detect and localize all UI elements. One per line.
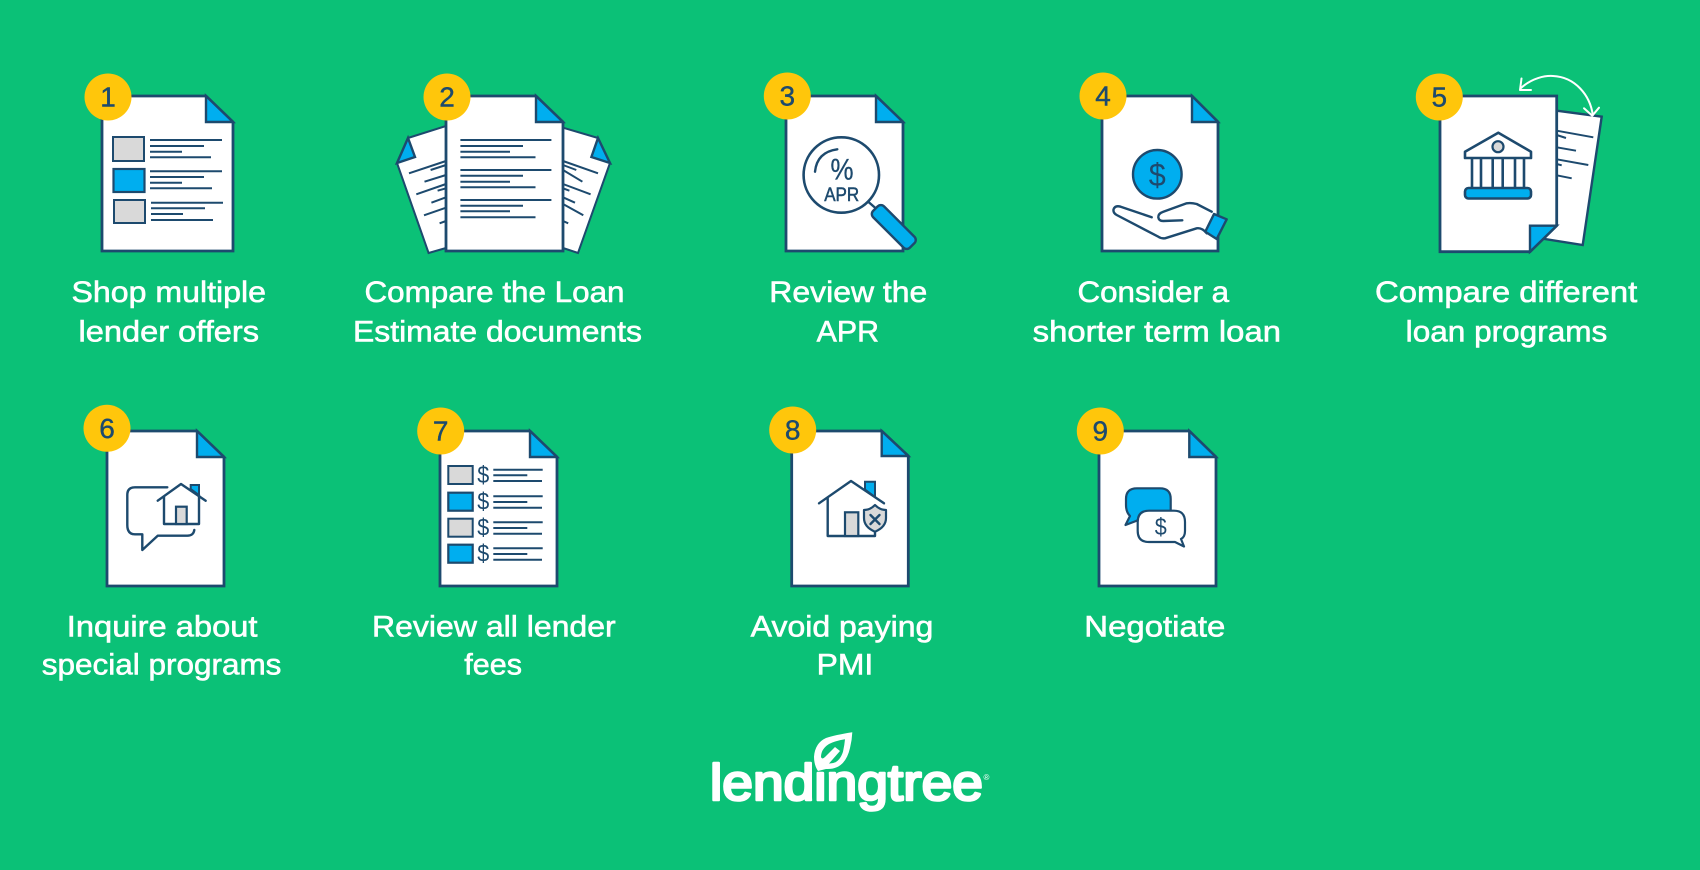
icon: document with hand and coin xyxy=(1102,96,1227,251)
icon: document with house and shield xyxy=(792,431,908,586)
label: step 4: shorter term loan xyxy=(1033,316,1281,348)
icon: document with fee list xyxy=(440,431,557,586)
icon: document with fee list: $ xyxy=(477,514,489,542)
badge: number 5: 5 xyxy=(1432,82,1447,112)
label: step 6 xyxy=(42,610,281,682)
panel: step 6 inquire about special programs xyxy=(42,405,281,682)
icon: document with magnifier: APR xyxy=(824,185,859,206)
icon: document with speech bubbles xyxy=(1099,431,1216,586)
panel: step 5 compare different loan programs xyxy=(1375,74,1638,348)
panel: step 7 review all lender fees xyxy=(372,408,616,682)
label: step 6: special programs xyxy=(42,648,281,682)
label: step 3: APR xyxy=(817,316,879,348)
label: step 1 xyxy=(72,276,266,348)
label: step 1: lender offers xyxy=(78,316,259,348)
label: step 2: Estimate documents xyxy=(353,316,642,348)
badge: number 3 xyxy=(764,72,811,120)
badge: number 6 xyxy=(84,405,130,452)
label: step 6: Inquire about xyxy=(67,610,258,644)
label: step 1: Shop multiple xyxy=(72,276,266,309)
label: step 3: Review the xyxy=(769,276,927,309)
panel: step 8 avoid paying PMI xyxy=(751,406,933,682)
icon: document with bank xyxy=(1440,96,1557,252)
badge: number 1 xyxy=(84,74,132,120)
badge: number 2 xyxy=(424,74,470,120)
icon: leaf xyxy=(814,732,852,771)
badge: number 1: 1 xyxy=(100,82,116,112)
icon: three fanned documents xyxy=(397,96,610,253)
badge: number 6: 6 xyxy=(99,413,115,444)
icon: back page xyxy=(1545,111,1602,245)
icon: document with fee list: $ xyxy=(477,540,489,568)
icon: document with speech bubbles: $ xyxy=(1155,514,1167,541)
badge: number 5 xyxy=(1416,74,1463,120)
panel: step 2 compare the loan estimate documents xyxy=(353,74,642,348)
icon: document with magnifier: % xyxy=(830,153,854,186)
label: step 2 xyxy=(353,276,642,348)
label: step 7: fees xyxy=(464,648,522,682)
badge: number 4 xyxy=(1080,72,1126,120)
badge: number 8: 8 xyxy=(785,414,800,446)
icon: document with hand and coin: $ xyxy=(1149,157,1166,193)
label: step 5: Compare different xyxy=(1375,276,1638,309)
label: step 4: Consider a xyxy=(1078,276,1229,309)
badge: number 7: 7 xyxy=(433,416,448,446)
badge: number 4: 4 xyxy=(1095,80,1111,112)
registered mark: ® xyxy=(984,773,990,782)
badge: number 8 xyxy=(769,406,816,454)
panel: step 9 negotiate xyxy=(1077,408,1225,644)
label: step 8 xyxy=(751,610,933,682)
icon: document with fee list: $ xyxy=(477,462,489,489)
arrow: swap pages xyxy=(1520,76,1599,116)
wordmark: lendingtree xyxy=(710,754,983,811)
badge: number 2: 2 xyxy=(439,82,455,112)
label: step 7 xyxy=(372,610,616,682)
badge: number 3: 3 xyxy=(780,80,795,112)
label: step 7: Review all lender xyxy=(372,610,616,644)
badge: number 9: 9 xyxy=(1093,416,1108,446)
label: step 5: loan programs xyxy=(1406,316,1607,348)
icon: document with house in speech bubble xyxy=(107,431,224,586)
icon: document with fee list: $ xyxy=(477,488,489,516)
panel: step 3 review the APR xyxy=(764,72,927,348)
logo: lendingtree xyxy=(710,732,990,811)
label: step 2: Compare the Loan xyxy=(364,276,624,309)
label: step 4 xyxy=(1033,276,1281,348)
label: step 8: Avoid paying xyxy=(751,610,933,644)
icon: document with magnifier xyxy=(786,96,918,251)
badge: number 7 xyxy=(417,408,464,454)
panel: step 4 consider a shorter term loan xyxy=(1033,72,1281,348)
label: step 3 xyxy=(769,276,927,348)
panel: step 1 shop multiple lender offers xyxy=(72,74,266,348)
icon: document with list xyxy=(102,96,233,251)
label: step 5 xyxy=(1375,276,1638,348)
label: step 8: PMI xyxy=(817,648,873,682)
badge: number 9 xyxy=(1077,408,1124,454)
label: step 9: Negotiate xyxy=(1084,610,1225,644)
